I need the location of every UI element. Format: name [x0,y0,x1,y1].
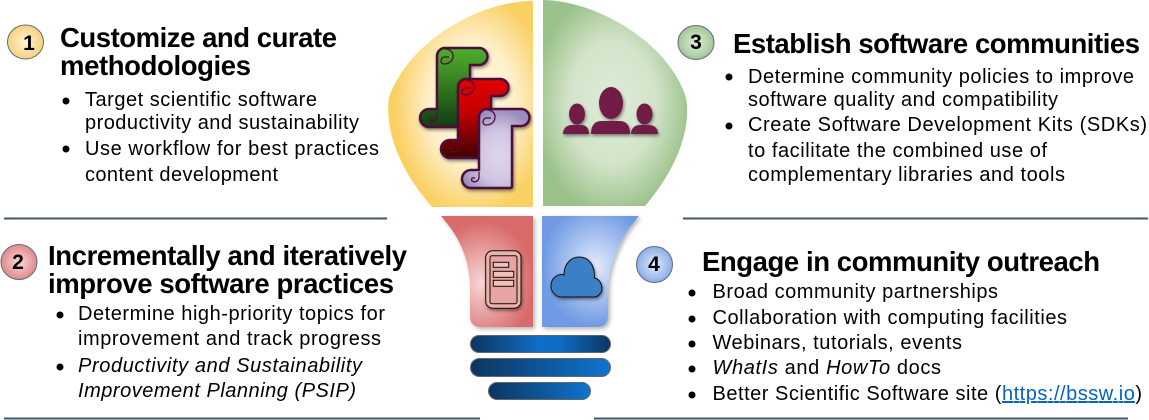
green scroll [420,48,488,127]
bullets 1: content development [85,164,278,186]
bullets 4: Webinars, tutorials, events [712,332,962,354]
icon: server document [486,251,521,308]
panel 4: community outreach [636,246,1142,405]
heading 1: methodologies [60,50,251,81]
bulb: lower left red socket [441,216,533,327]
heading 1: Customize and curate [60,22,337,53]
bullets 4: WhatIs and HowTo docs [712,357,941,379]
badge 2 [1,244,37,280]
icon: cloud [551,257,602,297]
bullets 1: Use workflow for best practices [85,138,379,160]
panel 2: incrementally improve [1,240,408,402]
bullets 2: Improvement Planning (PSIP) [78,380,356,402]
icon: community people [563,87,658,134]
heading 1 [60,22,337,81]
heading 3: Establish software communities [733,28,1140,59]
bullets 3: complementary libraries and tools [748,164,1065,186]
bullets 1: productivity and sustainability [85,112,359,134]
badge 2: 2 [12,251,24,274]
heading 2 [48,240,408,299]
badge 1: 1 [23,32,35,55]
badge 3: 3 [690,31,702,54]
heading 4: Engage in community outreach [702,246,1100,277]
bullets 3: Determine community policies to improve [748,66,1134,88]
bulb base bars [470,336,610,400]
bullets 4 [688,281,1142,405]
panel 3: software communities [678,26,1147,186]
bulb: lower right blue socket [542,216,639,327]
bullets 2: Productivity and Sustainability [78,355,363,377]
bullets 2 [56,303,385,402]
panel 1: customize and curate [8,22,379,186]
badge 4 [636,246,672,282]
bullets 1: Target scientific software [85,89,317,111]
bullets 2: improvement and track progress [78,328,381,350]
bullets 1 [62,89,379,186]
bullets 2: Determine high-priority topics for [78,303,385,325]
bullets 4: Broad community partnerships [712,281,998,303]
bulb: top left yellow quadrant [388,1,533,207]
heading 2: improve software practices [48,268,394,299]
badge 3 [678,26,714,60]
bulb: top right green quadrant [543,0,687,206]
heading 2: Incrementally and iteratively [48,240,408,271]
bullets 3: to facilitate the combined use of [748,140,1047,162]
red scroll [441,79,508,158]
lilac scroll [462,109,530,188]
icon: scrolls [420,48,530,188]
bullets 3 [726,66,1147,186]
badge 4: 4 [648,253,660,276]
bullets 4: Better Scientific Software site (https://bssw.io) [712,383,1142,405]
bullets 4: Collaboration with computing facilities [712,307,1067,329]
badge 1 [8,25,44,59]
bullets 3: software quality and compatibility [748,89,1058,111]
bullets 3: Create Software Development Kits (SDKs) [748,114,1147,136]
